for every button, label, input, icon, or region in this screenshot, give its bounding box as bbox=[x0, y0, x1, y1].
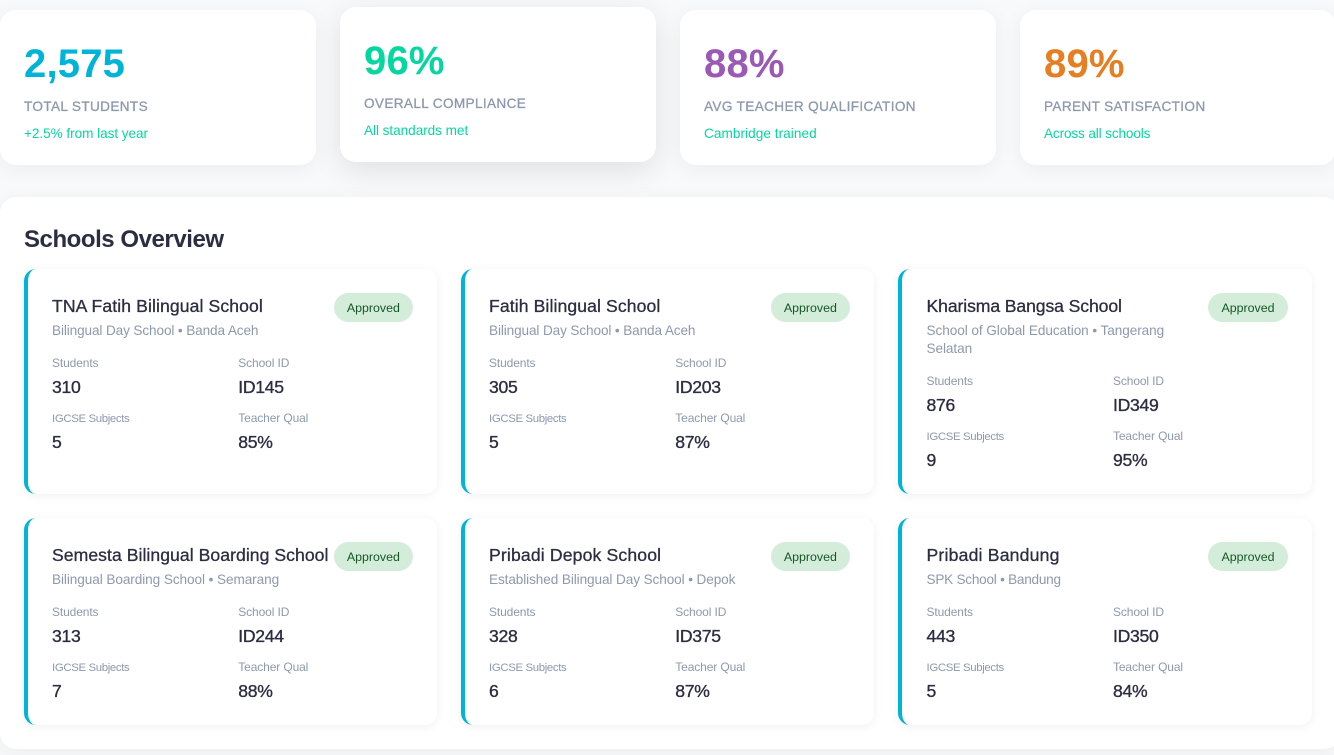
metric: igcse subjects: 5 bbox=[489, 432, 498, 452]
metric: students bbox=[926, 374, 973, 415]
metric: teacher qualification bbox=[1113, 429, 1183, 470]
stat note: Across all schools bbox=[1044, 126, 1150, 141]
school type and location: Bilingual Day School • Banda Aceh bbox=[52, 323, 258, 338]
metric: school id: School ID bbox=[1113, 374, 1164, 388]
metric: school id bbox=[1113, 374, 1164, 415]
metric: school id bbox=[675, 356, 726, 397]
stat card: average teacher qualification bbox=[680, 10, 996, 165]
metric: students: Students bbox=[489, 356, 535, 370]
stat value: 89% bbox=[1044, 42, 1125, 86]
stat value: 88% bbox=[704, 42, 785, 86]
school name: Semesta Bilingual Boarding School bbox=[52, 545, 328, 565]
metric: igcse subjects bbox=[489, 662, 566, 701]
school card: Semesta Bilingual Boarding School bbox=[24, 518, 437, 725]
metric: students: 328 bbox=[489, 626, 517, 646]
school name: TNA Fatih Bilingual School bbox=[52, 296, 263, 316]
metric: igcse subjects: 5 bbox=[52, 432, 62, 452]
metric: teacher qualification: 84% bbox=[1113, 681, 1147, 701]
metric: students bbox=[926, 605, 973, 646]
metric: students: Students bbox=[52, 605, 98, 619]
status badge: Approved bbox=[347, 550, 400, 564]
stat note: All standards met bbox=[364, 123, 468, 138]
metric: school id: ID375 bbox=[675, 626, 721, 646]
metric: teacher qualification: Teacher Qual bbox=[1113, 660, 1183, 674]
status badge bbox=[334, 542, 413, 571]
metric: students bbox=[489, 605, 536, 646]
status badge: Approved bbox=[1221, 301, 1275, 315]
stat label: AVG TEACHER QUALIFICATION bbox=[704, 99, 916, 114]
metric: school id bbox=[675, 605, 726, 646]
metric: igcse subjects: 5 bbox=[926, 681, 936, 701]
metric: teacher qualification bbox=[675, 411, 745, 452]
stat note: Cambridge trained bbox=[704, 126, 817, 141]
stat value: 96% bbox=[364, 39, 445, 83]
school card: Kharisma Bangsa School bbox=[898, 269, 1312, 494]
metric: students bbox=[52, 605, 98, 646]
metric: igcse subjects: IGCSE Subjects bbox=[52, 413, 129, 425]
status badge: Approved bbox=[784, 550, 837, 564]
school type and location: Bilingual Boarding School • Semarang bbox=[52, 572, 279, 587]
school name: Pribadi Depok School bbox=[489, 545, 661, 565]
metric: teacher qualification bbox=[238, 660, 308, 701]
status badge bbox=[771, 542, 850, 571]
status badge: Approved bbox=[784, 301, 837, 315]
school card: TNA Fatih Bilingual School bbox=[24, 269, 437, 494]
school card: Pribadi Bandung bbox=[898, 518, 1312, 725]
metric: students bbox=[489, 356, 536, 397]
metric: school id: ID350 bbox=[1113, 626, 1158, 646]
school type and location: Established Bilingual Day School • Depok bbox=[489, 572, 735, 587]
metric: students: Students bbox=[926, 374, 973, 388]
metric: igcse subjects bbox=[926, 662, 1004, 701]
school card: Pribadi Depok School bbox=[461, 518, 874, 725]
metric: teacher qualification: Teacher Qual bbox=[1113, 429, 1183, 443]
metric: school id bbox=[238, 356, 289, 397]
metric: school id: ID244 bbox=[238, 626, 284, 646]
metric: igcse subjects: IGCSE Subjects bbox=[489, 413, 566, 425]
metric: teacher qualification: Teacher Qual bbox=[238, 411, 308, 425]
metric: igcse subjects: 9 bbox=[926, 450, 936, 470]
school type and location: School of Global Education • Tangerang Selatan bbox=[926, 323, 1164, 356]
metric: school id: ID145 bbox=[238, 377, 284, 397]
school type and location: SPK School • Bandung bbox=[926, 572, 1061, 587]
stat card: overall compliance bbox=[340, 7, 656, 162]
metric: igcse subjects: IGCSE Subjects bbox=[926, 431, 1004, 443]
stat label: TOTAL STUDENTS bbox=[24, 99, 148, 114]
metric: school id: School ID bbox=[238, 356, 289, 370]
metric: igcse subjects bbox=[52, 413, 130, 452]
stat card: total students bbox=[0, 10, 316, 165]
stat value: 2,575 bbox=[24, 42, 125, 86]
metric: students bbox=[52, 356, 98, 397]
metric: igcse subjects: IGCSE Subjects bbox=[489, 662, 566, 674]
status badge bbox=[1208, 293, 1288, 322]
metric: students: 443 bbox=[926, 626, 955, 646]
metric: school id: ID203 bbox=[675, 377, 721, 397]
metric: students: 876 bbox=[926, 395, 955, 415]
metric: students: Students bbox=[52, 356, 98, 370]
status badge: Approved bbox=[347, 301, 400, 315]
stat label: PARENT SATISFACTION bbox=[1044, 99, 1206, 114]
school name: Pribadi Bandung bbox=[926, 545, 1060, 565]
metric: school id: School ID bbox=[675, 605, 726, 619]
metric: students: 313 bbox=[52, 626, 80, 646]
metric: igcse subjects: IGCSE Subjects bbox=[926, 662, 1004, 674]
status badge bbox=[771, 293, 850, 322]
metric: igcse subjects bbox=[489, 413, 566, 452]
metric: students: Students bbox=[489, 605, 535, 619]
status badge bbox=[1208, 542, 1288, 571]
metric: teacher qualification: 95% bbox=[1113, 450, 1147, 470]
metric: teacher qualification: 88% bbox=[238, 681, 273, 701]
school type and location: Bilingual Day School • Banda Aceh bbox=[489, 323, 695, 338]
metric: school id: School ID bbox=[1113, 605, 1164, 619]
stat card: parent satisfaction bbox=[1020, 10, 1334, 165]
status badge: Approved bbox=[1221, 550, 1275, 564]
metric: school id: School ID bbox=[238, 605, 289, 619]
metric: school id: School ID bbox=[675, 356, 726, 370]
metric: students: 310 bbox=[52, 377, 80, 397]
status badge bbox=[334, 293, 413, 322]
stat note: +2.5% from last year bbox=[24, 126, 148, 141]
metric: school id: ID349 bbox=[1113, 395, 1158, 415]
school name: Fatih Bilingual School bbox=[489, 296, 660, 316]
metric: teacher qualification: 87% bbox=[675, 681, 710, 701]
school name: Kharisma Bangsa School bbox=[926, 296, 1122, 316]
metric: igcse subjects: 7 bbox=[52, 681, 62, 701]
metric: igcse subjects: 6 bbox=[489, 681, 498, 701]
metric: teacher qualification: Teacher Qual bbox=[238, 660, 308, 674]
metric: teacher qualification bbox=[675, 660, 745, 701]
metric: igcse subjects bbox=[52, 662, 130, 701]
metric: teacher qualification bbox=[238, 411, 308, 452]
school card: Fatih Bilingual School bbox=[461, 269, 874, 494]
metric: school id bbox=[238, 605, 289, 646]
metric: teacher qualification: Teacher Qual bbox=[675, 660, 745, 674]
metric: igcse subjects: IGCSE Subjects bbox=[52, 662, 129, 674]
metric: students: 305 bbox=[489, 377, 517, 397]
stat label: OVERALL COMPLIANCE bbox=[364, 96, 526, 111]
metric: teacher qualification bbox=[1113, 660, 1183, 701]
metric: teacher qualification: Teacher Qual bbox=[675, 411, 745, 425]
heading: Schools Overview bbox=[24, 226, 224, 253]
panel: schools overview bbox=[0, 197, 1334, 749]
metric: teacher qualification: 87% bbox=[675, 432, 710, 452]
metric: teacher qualification: 85% bbox=[238, 432, 273, 452]
metric: students: Students bbox=[926, 605, 973, 619]
metric: school id bbox=[1113, 605, 1164, 646]
metric: igcse subjects bbox=[926, 431, 1004, 470]
